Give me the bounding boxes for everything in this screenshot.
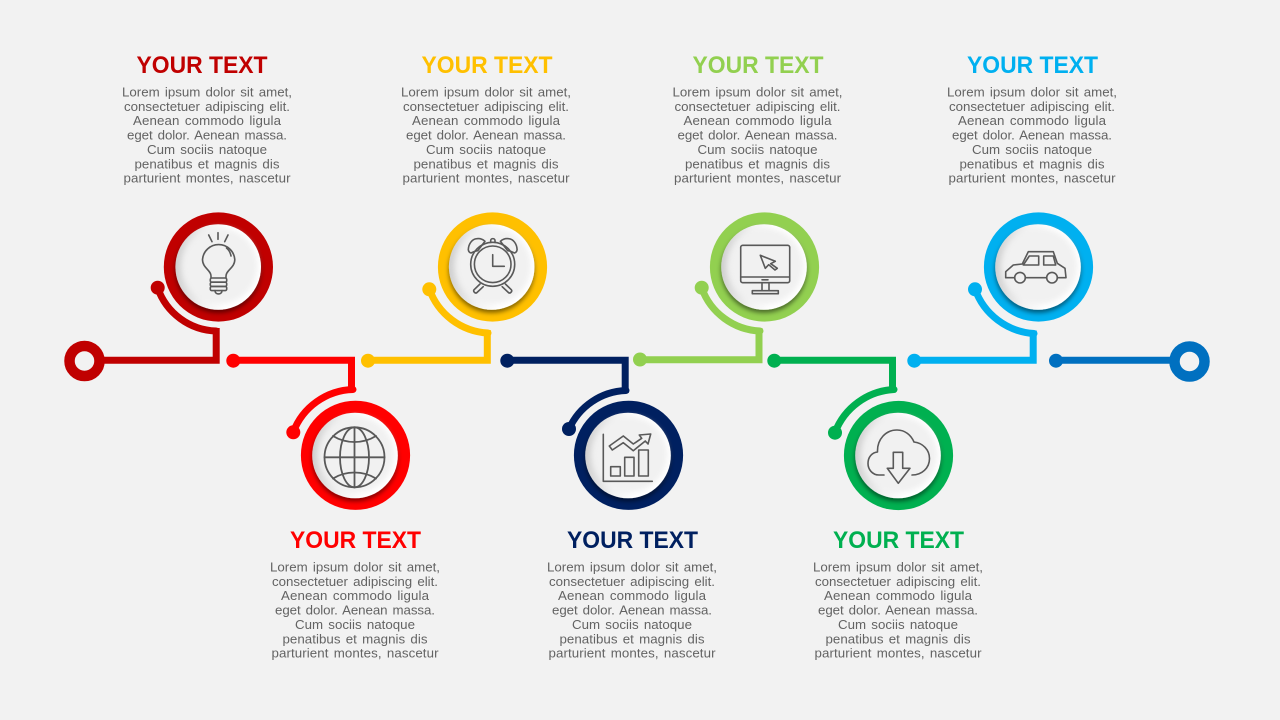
text block: step 1 xyxy=(122,52,292,186)
body: step 3 xyxy=(401,84,571,186)
body: step 3: Cum sociis natoque xyxy=(426,142,546,157)
step 1: dark red connector xyxy=(70,281,216,376)
step 5: lime connector xyxy=(633,281,760,366)
body: step 6: consectetuer adipiscing elit. xyxy=(815,574,981,589)
body: step 1: Lorem ipsum dolor sit amet, xyxy=(122,84,292,100)
body: step 4: Cum sociis natoque xyxy=(572,617,692,632)
body: step 2: consectetuer adipiscing elit. xyxy=(272,574,438,589)
step 3: yellow connector xyxy=(361,282,488,368)
body: step 2: Lorem ipsum dolor sit amet, xyxy=(270,560,440,574)
body: step 7: Cum sociis natoque xyxy=(972,142,1092,157)
icon: alarm clock xyxy=(468,239,517,293)
text block: step 5 xyxy=(672,52,842,186)
body: step 5: Lorem ipsum dolor sit amet, xyxy=(672,84,842,100)
badge: chart xyxy=(574,401,683,510)
body: step 3: penatibus et magnis dis xyxy=(414,156,559,171)
body: step 6: Aenean commodo ligula xyxy=(824,588,973,603)
body: step 5: Cum sociis natoque xyxy=(698,142,818,157)
text block: step 6 xyxy=(813,527,983,661)
heading: step 5: YOUR TEXT xyxy=(692,52,824,79)
body: step 2: Cum sociis natoque xyxy=(295,617,415,632)
heading: step 6: YOUR TEXT xyxy=(833,527,964,554)
body: step 5: penatibus et magnis dis xyxy=(685,156,830,171)
icon: lightbulb xyxy=(202,233,235,294)
body: step 4: Aenean commodo ligula xyxy=(558,588,707,603)
body: step 3: parturient montes, nascetur xyxy=(402,171,570,186)
step 7: sky blue connector xyxy=(907,282,1034,368)
body: step 3: eget dolor. Aenean massa. xyxy=(406,128,566,143)
body: step 2: eget dolor. Aenean massa. xyxy=(275,603,435,618)
body: step 5: Aenean commodo ligula xyxy=(684,113,832,128)
body: step 4: parturient montes, nascetur xyxy=(548,646,716,661)
badge: lightbulb xyxy=(164,212,273,322)
text block: step 3 xyxy=(401,52,571,186)
body: step 1: consectetuer adipiscing elit. xyxy=(124,99,290,114)
body: step 7: Lorem ipsum dolor sit amet, xyxy=(947,84,1117,100)
body: step 1: penatibus et magnis dis xyxy=(134,156,280,171)
body: step 3: Aenean commodo ligula xyxy=(412,113,561,128)
body: step 7: penatibus et magnis dis xyxy=(960,156,1105,171)
body: step 1: Cum sociis natoque xyxy=(147,142,267,157)
body: step 7: consectetuer adipiscing elit. xyxy=(949,99,1115,114)
badge: cloud download xyxy=(844,401,953,510)
heading: step 7: YOUR TEXT xyxy=(967,52,1098,79)
text block: step 4 xyxy=(547,527,717,661)
body: step 6: penatibus et magnis dis xyxy=(826,631,971,646)
body: step 5: eget dolor. Aenean massa. xyxy=(678,128,838,143)
body: step 6: Cum sociis natoque xyxy=(838,617,958,632)
step 2: red connector xyxy=(226,354,353,439)
step 4: navy connector xyxy=(500,354,626,436)
icon: globe xyxy=(324,427,384,487)
body: step 6 xyxy=(813,560,983,661)
body: step 6: parturient montes, nascetur xyxy=(814,646,982,661)
badge: monitor xyxy=(710,212,819,322)
body: step 7 xyxy=(947,84,1117,186)
body: step 7: eget dolor. Aenean massa. xyxy=(952,128,1112,143)
step 8: blue end connector xyxy=(1049,346,1204,376)
text block: step 2 xyxy=(270,527,440,661)
body: step 2: penatibus et magnis dis xyxy=(282,631,428,646)
body: step 3: Lorem ipsum dolor sit amet, xyxy=(401,84,571,100)
badge: alarm clock xyxy=(438,212,547,322)
body: step 6: Lorem ipsum dolor sit amet, xyxy=(813,560,983,574)
body: step 2: parturient montes, nascetur xyxy=(272,646,439,661)
body: step 4: Lorem ipsum dolor sit amet, xyxy=(547,560,717,574)
body: step 2 xyxy=(270,560,440,661)
body: step 5: parturient montes, nascetur xyxy=(674,171,842,186)
body: step 1: Aenean commodo ligula xyxy=(133,113,282,128)
body: step 7: Aenean commodo ligula xyxy=(958,113,1107,128)
body: step 4: consectetuer adipiscing elit. xyxy=(549,574,715,589)
text block: step 7 xyxy=(947,52,1117,186)
badge: globe xyxy=(301,401,410,510)
body: step 5 xyxy=(672,84,842,186)
body: step 4: penatibus et magnis dis xyxy=(560,631,705,646)
icon: growth chart xyxy=(603,434,652,481)
heading: step 1: YOUR TEXT xyxy=(136,52,268,79)
body: step 4 xyxy=(547,560,717,661)
icon: car xyxy=(1006,252,1066,283)
body: step 6: eget dolor. Aenean massa. xyxy=(818,603,978,618)
body: step 7: parturient montes, nascetur xyxy=(948,171,1116,186)
body: step 5: consectetuer adipiscing elit. xyxy=(674,99,840,114)
body: step 4: eget dolor. Aenean massa. xyxy=(552,603,712,618)
body: step 2: Aenean commodo ligula xyxy=(281,588,430,603)
body: step 1: eget dolor. Aenean massa. xyxy=(127,128,287,143)
body: step 1: parturient montes, nascetur xyxy=(124,171,291,186)
icon: cloud download xyxy=(868,430,930,483)
icon: monitor with cursor xyxy=(741,245,790,294)
heading: step 4: YOUR TEXT xyxy=(567,527,698,554)
heading: step 3: YOUR TEXT xyxy=(422,52,553,79)
body: step 3: consectetuer adipiscing elit. xyxy=(403,99,569,114)
body: step 1 xyxy=(122,84,292,186)
badge: car xyxy=(984,212,1093,322)
step 6: green connector xyxy=(767,354,894,440)
heading: step 2: YOUR TEXT xyxy=(290,527,421,554)
